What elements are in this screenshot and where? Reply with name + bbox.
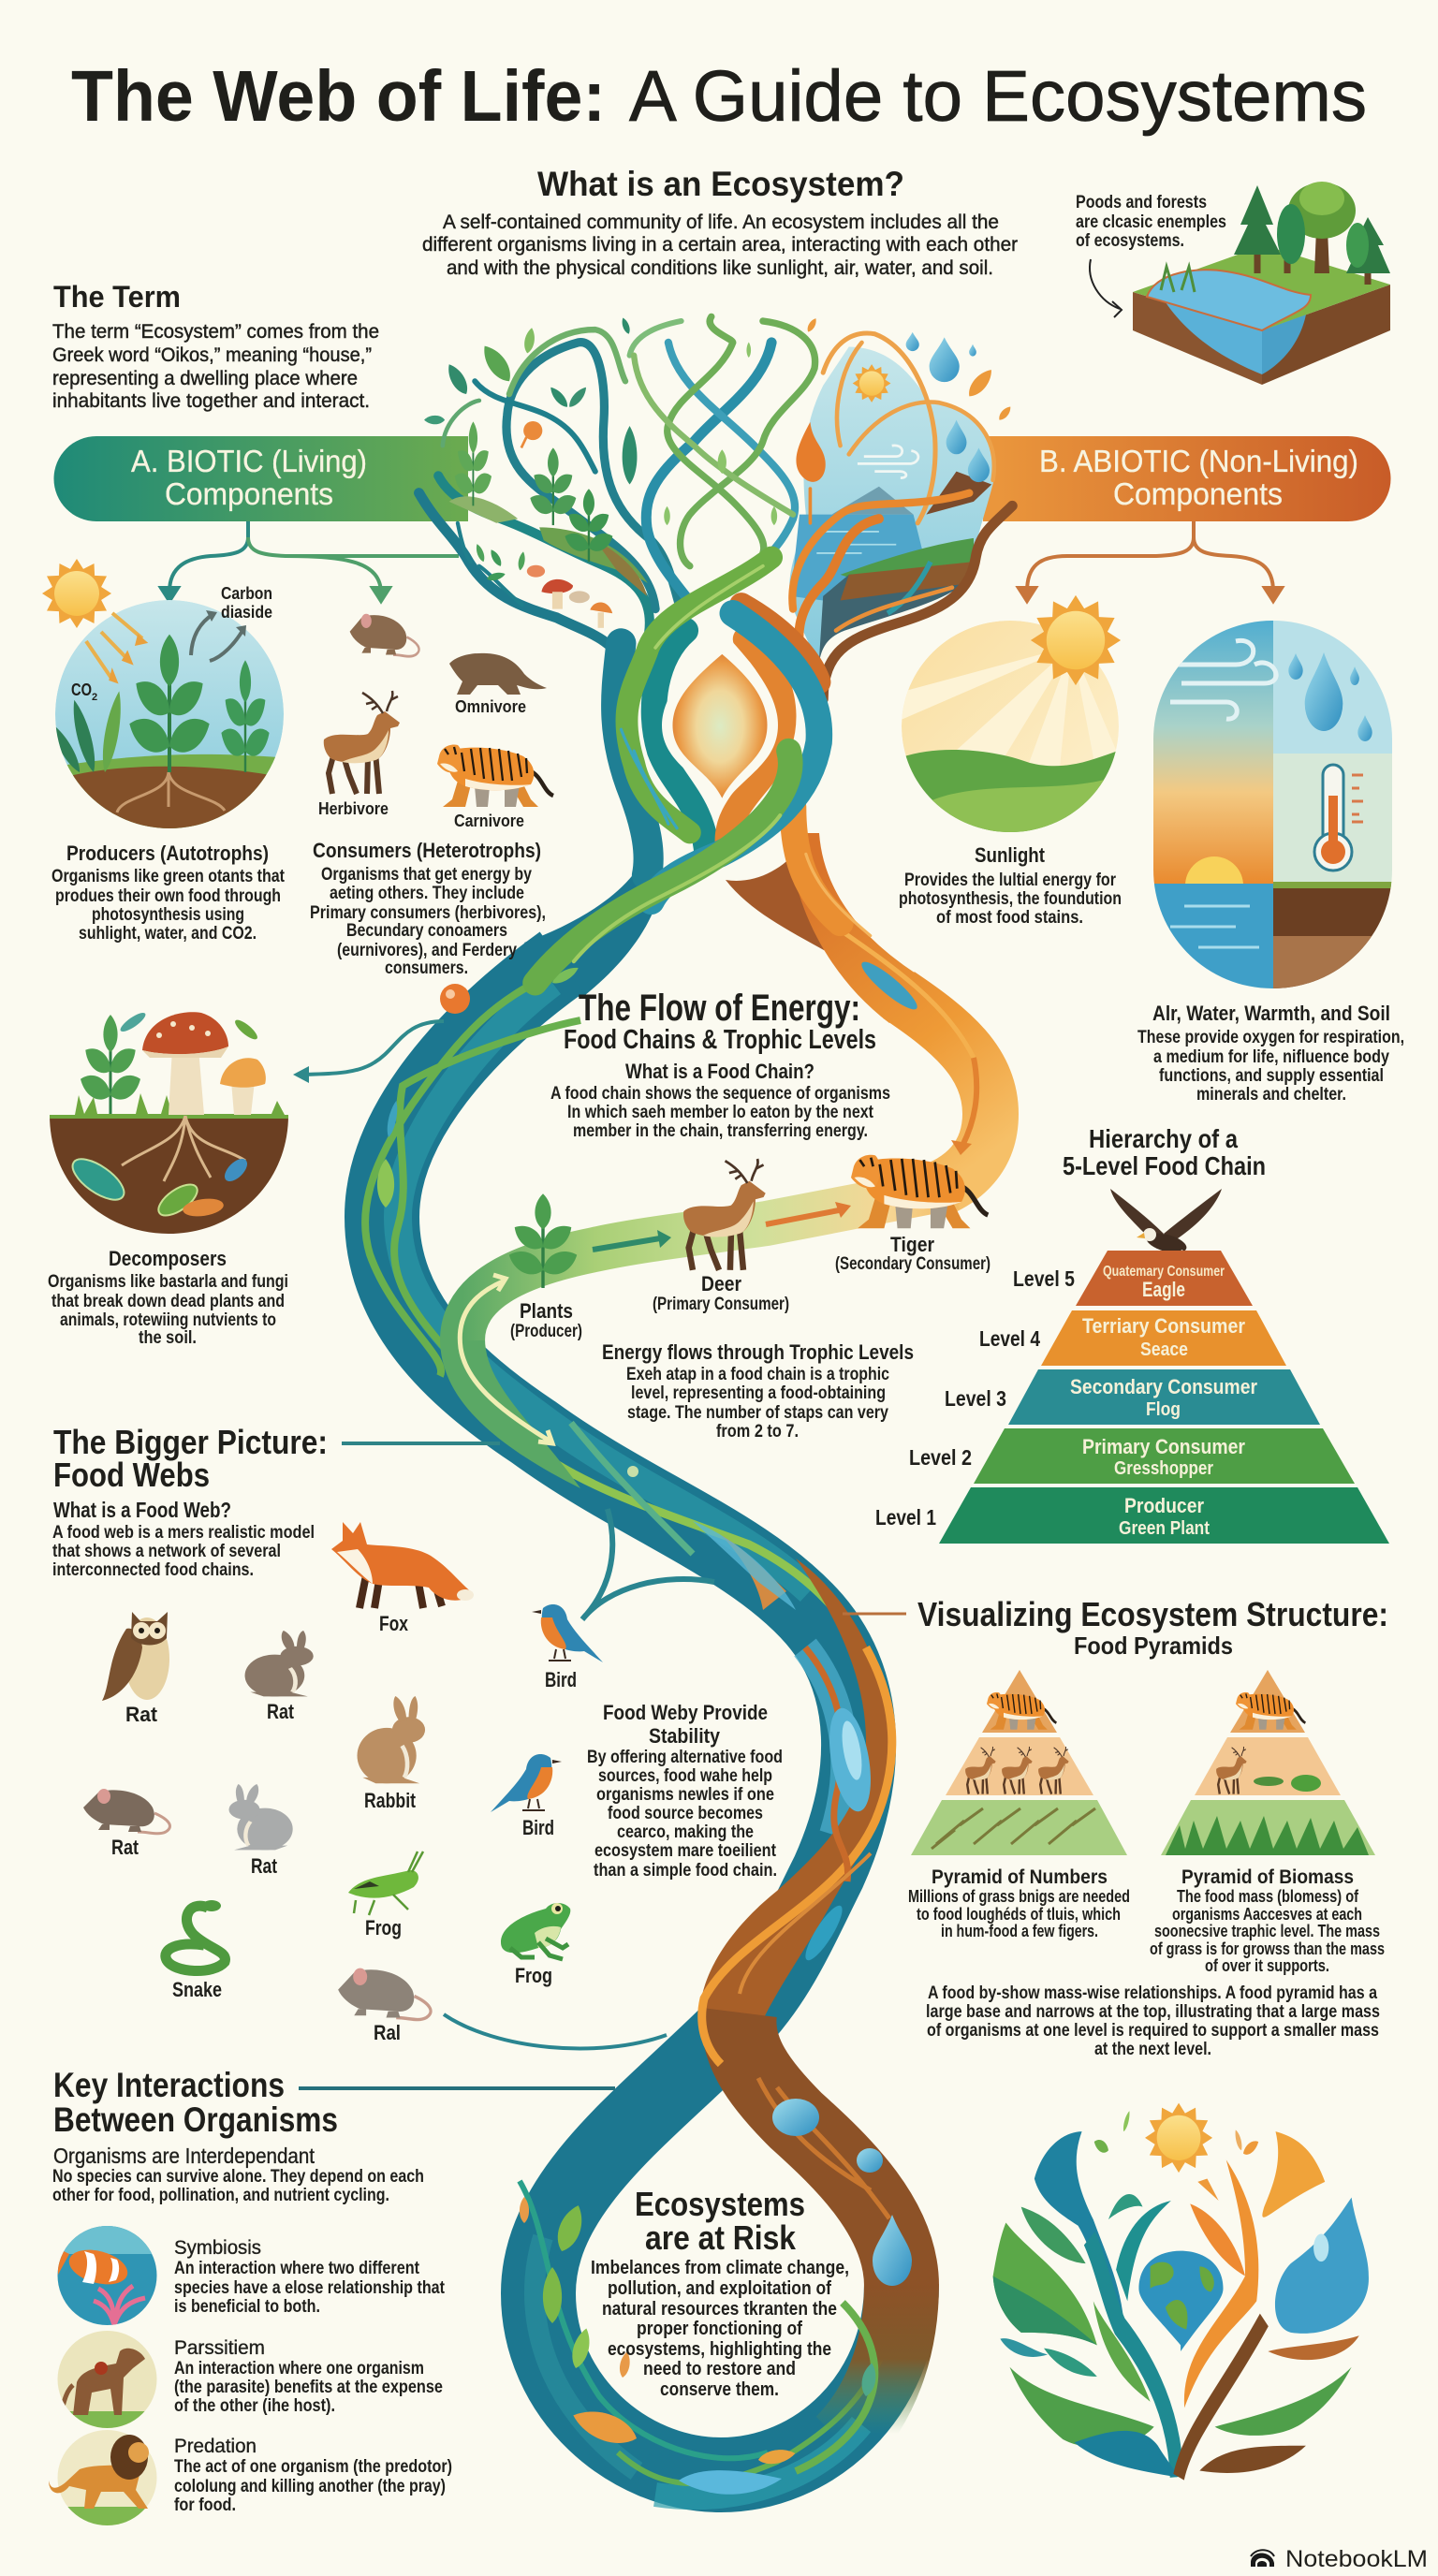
icon: tree of life crown [419, 316, 1013, 983]
text block: bigger picture food webs: interconnected food chains. [52, 1559, 254, 1580]
text block: decomposers: that break down dead plants and [51, 1291, 285, 1311]
icon: orange right branches [792, 333, 1012, 699]
bar: level 5: Quatemary Consumer [1103, 1264, 1225, 1280]
text block: what is an ecosystem: What is an Ecosystem? [537, 165, 904, 203]
banner: abiotic components: B. ABIOTIC (Non-Living) [1039, 444, 1358, 478]
text block: air water warmth soil: functions, and supply essential [1159, 1065, 1384, 1086]
arrow: ribbon to decomposers [293, 1021, 444, 1083]
heading: hierarchy: Hierarchy of a [1089, 1124, 1238, 1153]
food chain: plants, deer, tiger [506, 1155, 990, 1341]
text block: food webs provide stability: cearco, making the [617, 1822, 754, 1842]
text block: what is an ecosystem: A self-contained community of life. An ecosystem includes all the [443, 212, 999, 233]
panel: parasitism: Parssitiem [174, 2337, 265, 2359]
chart: pyramid of biomass: soonecsive traphic level. The mass [1154, 1921, 1380, 1940]
text block: what is an ecosystem: and with the physical conditions like sunlight, air, water, and soil. [447, 257, 993, 279]
text: producer labels and arrows: CO [71, 681, 92, 699]
icon: intertwined trunk strands [536, 558, 871, 983]
text block: key interactions: other for food, pollination, and nutrient cycling. [52, 2185, 389, 2205]
callout: ponds and forests: Poods and forests [1076, 193, 1207, 212]
panel: symbiosis: An interaction where two different [174, 2258, 419, 2278]
text block: consumers: Consumers (Heterotrophs) [313, 839, 541, 862]
text: producer labels and arrows: Carbon [221, 584, 272, 603]
icon: earth tree emblem [993, 2103, 1369, 2477]
text block: trophic levels: Energy flows through Trophic Levels [602, 1340, 914, 1364]
chart: pyramid of biomass: organisms Aaccesves at each [1172, 1904, 1362, 1924]
panel: symbiosis [56, 2226, 445, 2327]
banner: biotic components [54, 436, 468, 521]
food web animals: Bird [522, 1816, 554, 1839]
text block: visualizing ecosystem structure [843, 1595, 1388, 1660]
panel: predation [49, 2430, 452, 2527]
icon: abiotic sky and landscape scene [789, 347, 995, 665]
ribbon: food chain energy path [440, 1058, 976, 1488]
text block: trophic levels: from 2 to 7. [716, 1421, 799, 1442]
text block: the term: inhabitants live together and interact. [52, 390, 370, 412]
text block: decomposers [48, 1247, 288, 1348]
icon: dog with parasite [56, 2331, 159, 2430]
icon: grasshopper [348, 1852, 423, 1915]
text block: food webs provide stability: ecosystem mare toeilient [594, 1840, 776, 1861]
text block: consumers: Becundary conoamers [346, 920, 507, 941]
text block: bigger picture food webs: Food Webs [53, 1456, 210, 1494]
chart: pyramid of numbers: Pyramid of Numbers [932, 1866, 1108, 1888]
icon: consumer animals: Carnivore [454, 812, 524, 830]
icon: sunlight scene [899, 595, 1123, 842]
text block: consumers: Primary consumers (herbivores), [310, 902, 546, 923]
food chain: plants, deer, tiger: Plants [520, 1299, 573, 1323]
food chain: plants, deer, tiger: (Producer) [510, 1321, 582, 1341]
labels: level names: Level 1 [875, 1505, 936, 1530]
text block: producers [51, 842, 285, 944]
text block: the term [52, 280, 379, 412]
bar: level 4 [1041, 1310, 1286, 1366]
arrow: biotic connectors [161, 521, 459, 601]
title: A Guide to Ecosystems [629, 56, 1367, 137]
panel: predation: Predation [174, 2436, 257, 2457]
text block: bigger picture food webs: A food web is a mers realistic model [52, 1522, 315, 1543]
text block: decomposers: the soil. [139, 1327, 197, 1348]
icon: woven center knot of branches [630, 316, 815, 596]
arrow: abiotic connectors [1019, 521, 1282, 601]
text block: producers: Organisms like green otants that [51, 866, 285, 886]
panel: symbiosis: species have a elose relationship that [174, 2277, 445, 2298]
icon: consumer animals [318, 614, 553, 830]
text block: ecosystems at risk: Imbelances from climate change, [591, 2257, 849, 2278]
text block: ecosystems at risk: conserve them. [660, 2378, 779, 2400]
food chain: plants, deer, tiger: (Primary Consumer) [653, 1294, 789, 1314]
title: The Web of Life: [71, 56, 606, 137]
labels: level names [875, 1266, 1075, 1530]
chart: pyramid of biomass: The food mass (blomess) of [1177, 1886, 1359, 1906]
text block: bigger picture food webs [52, 1423, 500, 1580]
panel: symbiosis: Symbiosis [174, 2237, 261, 2259]
text: producer labels and arrows: diaside [221, 603, 272, 622]
heading: hierarchy [1063, 1124, 1266, 1180]
text block: visualizing ecosystem structure: Food Pyramids [1074, 1632, 1233, 1660]
icon: clownfish [56, 2226, 159, 2327]
ribbon: orange-brown winding trunk [699, 1559, 902, 2471]
text block: flow of energy: What is a Food Chain? [625, 1060, 814, 1083]
bar: level 2 [974, 1428, 1355, 1484]
food web animals [83, 1522, 603, 2044]
text block: ecosystems at risk: ecosystems, highlighting the [608, 2338, 831, 2360]
text block: trophic levels [602, 1340, 914, 1442]
text: producer labels and arrows: 2 [92, 692, 97, 703]
text block: food pyramid summary [926, 1983, 1380, 2059]
bar: level 3 [1008, 1369, 1320, 1425]
panel: parasitism: (the parasite) benefits at the expense [174, 2377, 443, 2397]
icon: snake [166, 1900, 225, 1971]
ribbon: blue-teal winding trunk [365, 842, 902, 2497]
callout: ponds and forests: are clcasic enemples [1076, 212, 1226, 232]
text block: bigger picture food webs: that shows a network of several [52, 1541, 281, 1561]
text block: key interactions: No species can survive alone. They depend on each [52, 2166, 424, 2187]
text block: visualizing ecosystem structure: Visualizing Ecosystem Structure: [917, 1595, 1388, 1633]
text block: air water warmth soil: a medium for life, nifluence body [1153, 1046, 1389, 1067]
panel: predation: for food. [174, 2495, 236, 2515]
text block: flow of energy: In which saeh member lo eaton by the next [567, 1102, 873, 1122]
food web animals: Rat [251, 1854, 278, 1878]
text block: ecosystems at risk [591, 2185, 849, 2400]
labels: level names: Level 5 [1013, 1266, 1075, 1291]
text block: what is an ecosystem: different organisms living in a certain area, interacting with each other [422, 234, 1018, 256]
text block: food webs provide stability: sources, food wahe help [598, 1765, 772, 1786]
icon: fox [331, 1522, 474, 1608]
text block: ecosystems at risk: pollution, and exploitation of [608, 2277, 831, 2299]
text block: key interactions: Organisms are Interdependant [53, 2144, 315, 2168]
panel: predation: coloIung and killing another (the pray) [174, 2476, 446, 2496]
food chain: plants, deer, tiger: Deer [701, 1272, 741, 1295]
text block: ecosystems at risk: proper fonctioning of [637, 2318, 802, 2339]
bar: level 1: Green Plant [1119, 1518, 1210, 1539]
banner: abiotic components [983, 436, 1391, 521]
icon: consumer animals: Omnivore [455, 697, 526, 716]
text block: air water warmth soil: Alr, Water, Warmth, and Soil [1152, 1002, 1390, 1025]
title [71, 56, 1367, 137]
text block: food webs provide stability: organisms newles if one [596, 1784, 774, 1805]
logo: NotebookLM: NotebookLM [1285, 2546, 1428, 2572]
food web animals: Rat [267, 1700, 295, 1723]
labels: level names: Level 4 [979, 1326, 1040, 1351]
icon: owl [102, 1612, 169, 1701]
text block: flow of energy: member in the chain, transferring energy. [573, 1120, 868, 1141]
food web animals: Fox [379, 1612, 409, 1635]
chart: pyramid of biomass: Pyramid of Biomass [1181, 1866, 1354, 1888]
text block: the term: The Term [53, 280, 181, 314]
bar: level 4: Seace [1140, 1339, 1188, 1360]
chart: five level food chain pyramid [875, 1124, 1389, 1544]
text block: flow of energy [550, 988, 890, 1141]
banner: abiotic components: Components [1113, 476, 1283, 511]
bar: level 5: Eagle [1142, 1278, 1185, 1301]
food web animals: Rat [111, 1836, 139, 1859]
text block: sunlight: photosynthesis, the foundution [899, 888, 1122, 909]
text block: the term: representing a dwelling place where [52, 368, 358, 389]
chart: pyramid of biomass: of over it supports. [1205, 1955, 1329, 1975]
text block: key interactions: Key Interactions [53, 2066, 285, 2104]
text block: producers: suhlight, water, and CO2. [79, 923, 257, 944]
icon: ribbon decorations, water drops and leaves [377, 964, 912, 2495]
text block: sunlight: Sunlight [975, 843, 1046, 867]
food chain: plants, deer, tiger: Tiger [890, 1233, 934, 1256]
text block: flow of energy: A food chain shows the sequence of organisms [550, 1083, 890, 1104]
text block: bigger picture food webs: What is a Food Web? [53, 1498, 231, 1522]
text block: key interactions [52, 2066, 615, 2205]
text block: trophic levels: Exeh atap in a food chain is a trophic [626, 1364, 889, 1384]
text block: consumers: consumers. [385, 958, 468, 978]
bar: level 4: Terriary Consumer [1082, 1314, 1245, 1338]
text block: consumers: (eurnivores), and Ferdery [337, 940, 517, 960]
labels: level names: Level 2 [909, 1445, 972, 1470]
icon: lion [49, 2430, 159, 2527]
icon: eagle [1110, 1189, 1222, 1258]
callout: ponds and forests: of ecosystems. [1076, 231, 1184, 251]
text block: food webs provide stability: By offering alternative food [587, 1747, 783, 1767]
icon: producer plant scene [47, 600, 290, 833]
text block: ecosystems at risk: Ecosystems [635, 2185, 805, 2223]
food web animals: Ral [374, 2021, 401, 2044]
text block: food webs provide stability: food source becomes [608, 1803, 763, 1823]
text block: ecosystems at risk: need to restore and [643, 2358, 796, 2379]
text block: food webs provide stability: Food Weby Provide [603, 1701, 768, 1724]
icon: teal left branches [419, 329, 679, 669]
bar: level 3: Flog [1146, 1399, 1181, 1420]
text block: sunlight: of most food stains. [936, 907, 1083, 928]
text block: air water warmth soil: minerals and chelter. [1196, 1084, 1346, 1105]
panel: parasitism [56, 2331, 443, 2430]
text block: flow of energy: Food Chains & Trophic Levels [564, 1025, 876, 1055]
text block: the term: Greek word “Oikos,” meaning “house,” [52, 344, 372, 366]
food web animals: Bird [545, 1668, 577, 1691]
bar: level 2: Primary Consumer [1082, 1435, 1245, 1458]
food web animals: Snake [172, 1978, 222, 2001]
text block: trophic levels: level, representing a food-obtaining [631, 1383, 886, 1403]
callout: ponds and forests [1076, 193, 1226, 317]
text block: food webs provide stability [587, 1701, 783, 1881]
chart: pyramid of numbers: Millions of grass bnigs are needed [908, 1886, 1130, 1906]
text block: consumers: Organisms that get energy by [321, 864, 532, 885]
food web animals: Frog [515, 1964, 552, 1987]
text block: decomposers: Organisms like bastarla and fungi [48, 1271, 288, 1292]
text block: food pyramid summary: at the next level. [1094, 2039, 1211, 2059]
text block: the term: The term “Ecosystem” comes from the [52, 321, 379, 343]
text block: food webs provide stability: Stability [649, 1724, 721, 1748]
text block: key interactions: Between Organisms [53, 2100, 338, 2139]
heading: hierarchy: 5-Level Food Chain [1063, 1151, 1266, 1180]
icon: pond and forest diorama [1133, 182, 1390, 385]
icon: consumer animals: Herbivore [318, 799, 389, 818]
text block: sunlight [899, 843, 1122, 928]
food web animals: Rat [125, 1703, 158, 1726]
chart: pyramid of biomass [1150, 1670, 1385, 1975]
text block: producers: Producers (Autotrophs) [66, 842, 269, 865]
text block: decomposers: Decomposers [109, 1247, 227, 1270]
text block: consumers [310, 839, 546, 978]
text block: producers: photosynthesis using [92, 904, 244, 925]
icon: glowing seed at trunk heart [662, 631, 778, 807]
text block: decomposers: animals, rotewiing nutvients to [60, 1310, 276, 1330]
bar: level 2: Gresshopper [1114, 1458, 1213, 1479]
labels: level names: Level 3 [945, 1386, 1006, 1411]
text block: ecosystems at risk: are at Risk [645, 2218, 797, 2257]
text block: consumers: aeting others. They include [330, 883, 524, 903]
arrow: food web branch lines [444, 1509, 714, 2048]
panel: parasitism: An interaction where one organism [174, 2358, 424, 2378]
text block: ecosystems at risk: natural resources tkranten the [602, 2298, 837, 2320]
text block: flow of energy: The Flow of Energy: [579, 988, 860, 1029]
text block: what is an ecosystem [422, 165, 1018, 279]
icon: leaves and plants in crown [424, 316, 1013, 628]
bar: level 3: Secondary Consumer [1070, 1375, 1257, 1398]
text block: trophic levels: stage. The number of staps can very [627, 1402, 888, 1423]
text block: air water warmth soil [1137, 1002, 1404, 1105]
text block: producers: produes their own food through [55, 886, 281, 906]
chart: pyramid of numbers [908, 1670, 1130, 1940]
panel: parasitism: of the other (ihe host). [174, 2395, 335, 2416]
chart: pyramid of numbers: in hum-food a few figers. [941, 1921, 1098, 1940]
banner: biotic components: Components [165, 476, 333, 511]
panel: symbiosis: is beneficial to both. [174, 2296, 320, 2317]
text block: food webs provide stability: than a simple food chain. [594, 1860, 777, 1881]
food chain: plants, deer, tiger: (Secondary Consumer) [835, 1253, 990, 1274]
bar: level 1: Producer [1124, 1494, 1204, 1517]
panel: predation: The act of one organism (the predotor) [174, 2456, 452, 2477]
chart: pyramid of numbers: to food loughéds of tluis, which [917, 1904, 1121, 1924]
food web animals: Frog [365, 1916, 402, 1939]
ribbon: orange branch down to the food chain [726, 833, 990, 1193]
food web animals: Rabbit [364, 1789, 417, 1812]
icon: decomposers soil scene [47, 1010, 292, 1240]
text block: sunlight: Provides the lultial energy for [904, 870, 1116, 890]
icon: air water warmth soil capsule [1153, 621, 1392, 992]
text block: bigger picture food webs: The Bigger Picture: [53, 1423, 328, 1461]
bar: level 1 [939, 1487, 1389, 1544]
text: producer labels and arrows [42, 559, 272, 703]
bar: level 5 [1076, 1251, 1253, 1306]
banner: biotic components: A. BIOTIC (Living) [131, 444, 367, 478]
